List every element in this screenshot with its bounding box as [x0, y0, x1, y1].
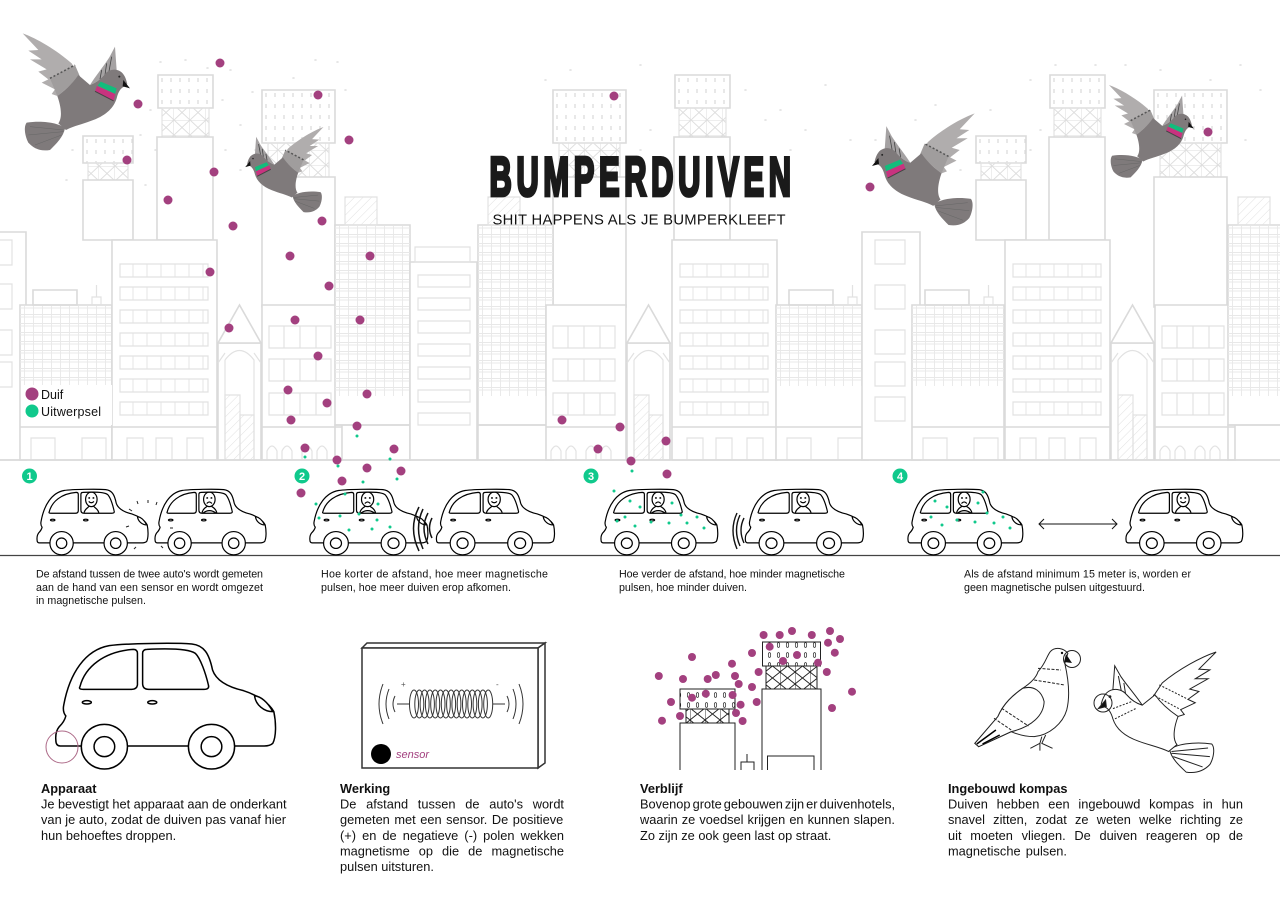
text block: Apparaat: hun behoeftes droppen.: [41, 828, 176, 843]
impact ticks: [126, 500, 173, 549]
step number 2: 2: [299, 471, 305, 483]
text block: Verblijf: Bovenop grote gebouwen zijn er duivenhotels,: [640, 796, 895, 812]
pigeons as dots: [655, 627, 856, 725]
device box: [362, 643, 545, 768]
text block: Werking: gemeten met een sensor. De positieve: [340, 812, 563, 827]
caption 2: [321, 568, 548, 594]
text block: Werking: [340, 781, 564, 874]
step number 4: [892, 468, 908, 484]
text block: Apparaat: [41, 781, 287, 843]
caption 2: pulsen, hoe meer duiven erop afkomen.: [321, 582, 511, 594]
car with droppings: [601, 489, 718, 555]
legend: duif en uitwerpsel: Uitwerpsel: [41, 405, 101, 419]
sensor: [371, 744, 430, 764]
plus and minus: [401, 680, 499, 689]
ground line: [0, 554, 1280, 556]
caption 1: [36, 568, 263, 607]
double arrow: [1039, 519, 1117, 529]
step number 3: 3: [588, 471, 594, 483]
step number 1: 1: [26, 471, 33, 483]
step 4: minimum 15 meter, no pulses: [892, 468, 1243, 594]
text block: Apparaat: Apparaat: [41, 781, 97, 796]
skyline background: [0, 60, 1280, 460]
text block: Verblijf: Verblijf: [640, 781, 683, 796]
text block: Werking: magnetisme op die de magnetische: [340, 844, 564, 858]
pigeon: right: [872, 113, 975, 225]
coil: [379, 684, 523, 724]
caption 3: Hoe verder de afstand, hoe minder magnetische: [619, 568, 845, 580]
car behind: [745, 489, 863, 555]
device marker circle: [46, 731, 78, 763]
flying pigeon compass circle: [1094, 694, 1112, 712]
text block: Verblijf: waarin ze voedsel krijgen en kunnen slapen.: [639, 812, 895, 827]
step 3: larger distance, fewer pulses: [584, 468, 863, 594]
car behind: [436, 489, 554, 555]
illustration: car with device: [46, 643, 276, 769]
magnetic pulse waves: [414, 507, 432, 551]
text block: Ingebouwd kompas: uit moeten vliegen. De duiven reageren op de: [948, 828, 1243, 843]
step number 4: 4: [897, 471, 904, 483]
caption 3: pulsen, hoe minder duiven.: [619, 582, 747, 594]
text block: Werking: pulsen uitsturen.: [340, 859, 434, 874]
text block: Werking: (+) en de negatieve (-) polen wekken: [340, 828, 564, 843]
droppings on car: [304, 434, 398, 532]
caption 4: Als de afstand minimum 15 meter is, worden er: [964, 568, 1191, 580]
standing pigeon beak and compass circle: [1061, 650, 1080, 668]
caption 1: in magnetische pulsen.: [36, 595, 146, 607]
caption 1: aan de hand van een sensor en wordt omgezet: [36, 582, 263, 594]
illustration: pigeons with compass: [975, 648, 1216, 773]
text block: Apparaat: Je bevestigt het apparaat aan de onderkant: [41, 796, 287, 812]
sensor: sensor: [396, 749, 430, 761]
buildings: [680, 642, 821, 770]
text block: Ingebouwd kompas: [948, 781, 1243, 858]
car behind: [155, 489, 266, 555]
car outline: [56, 643, 276, 769]
plus and minus: -: [496, 680, 499, 689]
text block: Ingebouwd kompas: Ingebouwd kompas: [948, 781, 1067, 796]
car front: [37, 489, 148, 555]
text block: Werking: Werking: [340, 781, 390, 796]
flying pigeon outline: [1098, 652, 1216, 773]
plus and minus: +: [401, 680, 406, 689]
droppings on car: [930, 490, 1012, 530]
text block: Werking: De afstand tussen de auto's wordt: [340, 796, 564, 812]
caption 4: geen magnetische pulsen uitgestuurd.: [964, 582, 1145, 594]
legend: duif en uitwerpsel: [22, 385, 112, 425]
step 1: distance measured: [22, 468, 266, 607]
illustration: device with coil and sensor: [362, 643, 545, 768]
step number 3: [584, 468, 598, 484]
text block: Ingebouwd kompas: magnetische pulsen.: [948, 844, 1067, 858]
droppings on car: [612, 470, 706, 530]
pigeon: far right: [1109, 85, 1194, 178]
car behind: [1126, 489, 1243, 555]
caption 2: Hoe korter de afstand, hoe meer magnetische: [321, 568, 548, 580]
caption 1: De afstand tussen de twee auto's wordt gemeten: [36, 568, 263, 580]
text block: Verblijf: Zo zijn ze ook geen last op straat.: [640, 828, 831, 843]
pigeon: top left: [23, 33, 130, 150]
step number 2: [294, 468, 310, 484]
standing pigeon outline: [975, 648, 1069, 751]
caption 4: [964, 568, 1191, 594]
text block: Apparaat: van je auto, zodat de duiven pas vanaf hier: [41, 812, 287, 827]
step 2: short distance, more pulses: [294, 434, 554, 594]
legend: duif en uitwerpsel: Duif: [41, 388, 64, 402]
car with droppings: [908, 489, 1023, 555]
car with droppings: [310, 489, 428, 555]
text block: Ingebouwd kompas: snavel zitten, zodat ze weten welke richting ze: [948, 812, 1243, 827]
title: BUMPERDUIVEN: [490, 148, 796, 208]
step number 1: [22, 468, 37, 484]
illustration: pigeon hotels on buildings: [655, 627, 856, 770]
pigeon: second left: [245, 127, 323, 212]
magnetic pulse waves: [733, 513, 744, 549]
text block: Ingebouwd kompas: Duiven hebben een ingebouwd kompas in hun: [948, 796, 1243, 812]
text block: Verblijf: [639, 781, 895, 843]
falling pigeon droppings: purple dots: [122, 58, 1212, 498]
subtitle: SHIT HAPPENS ALS JE BUMPERKLEEFT: [492, 212, 786, 228]
caption 3: [619, 568, 845, 594]
